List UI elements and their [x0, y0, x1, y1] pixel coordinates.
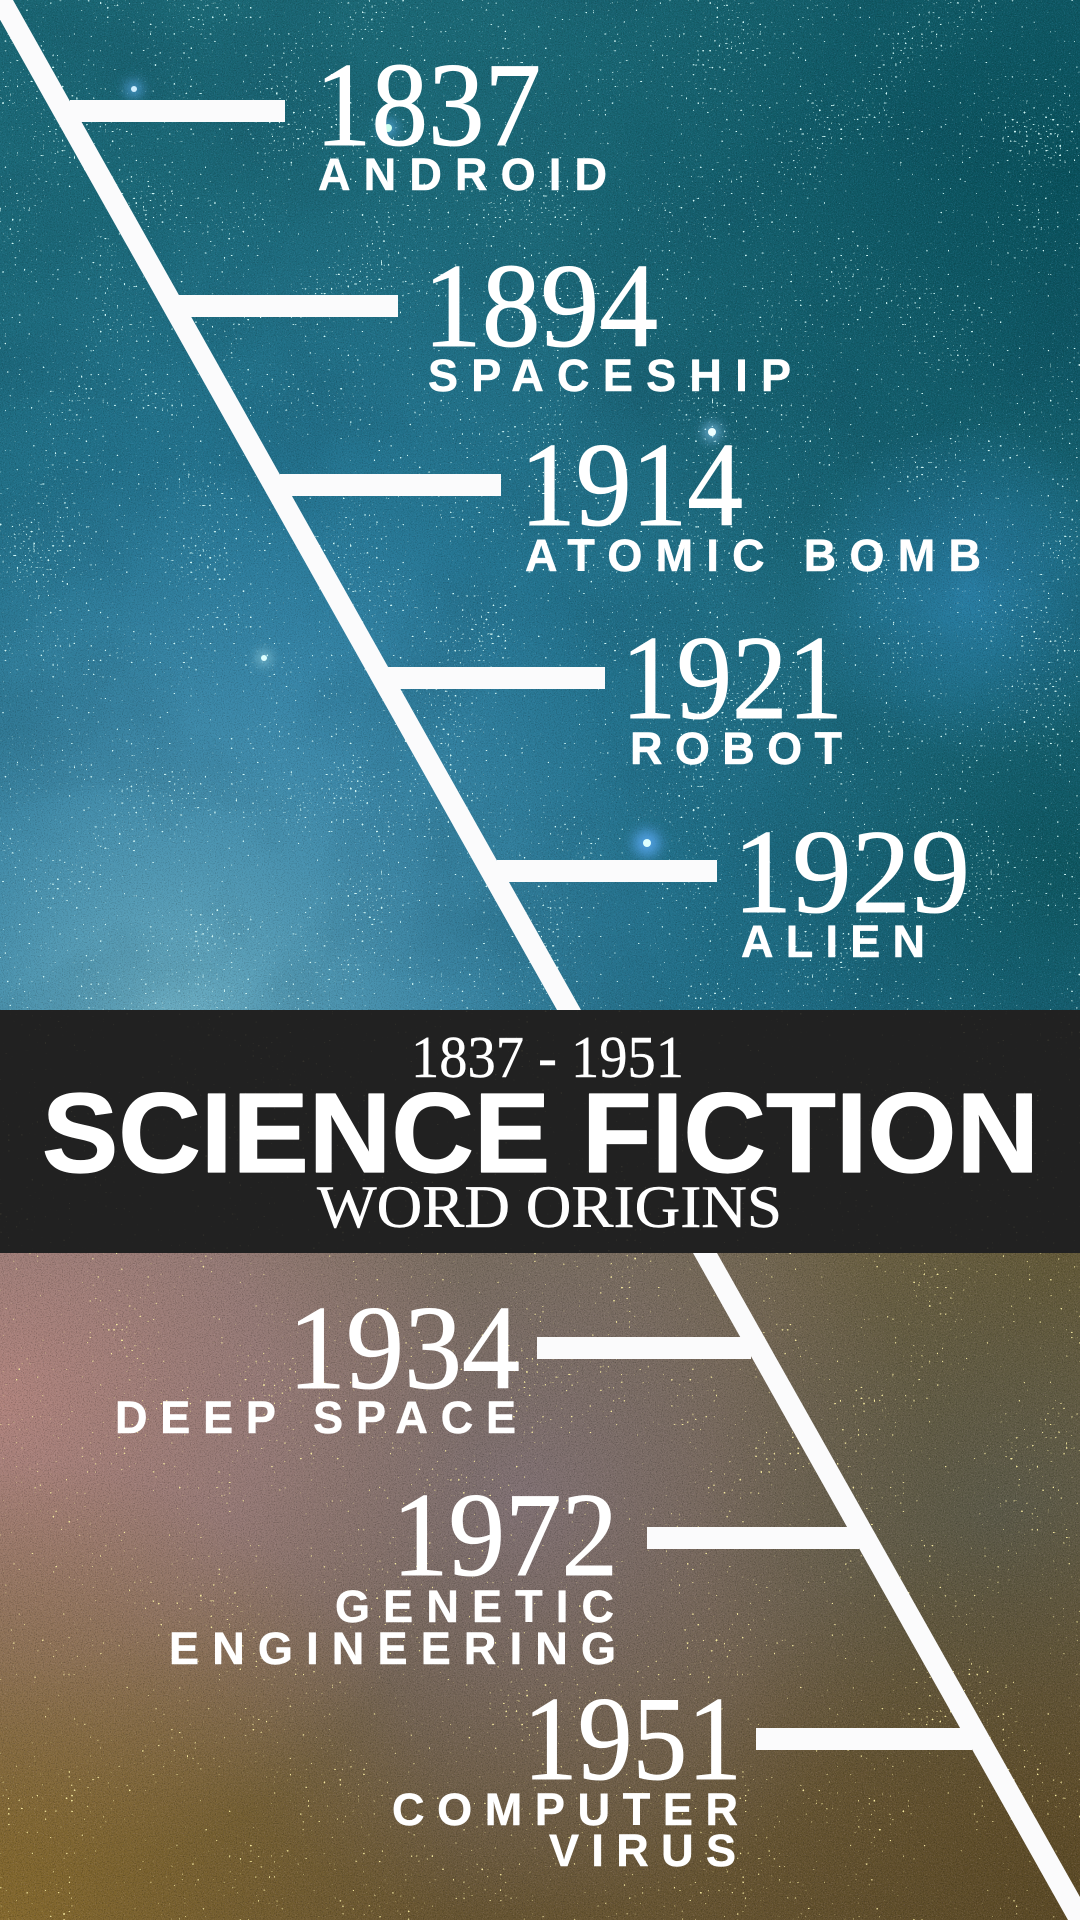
timeline entry: 1929 alien: 1929 [733, 805, 970, 938]
timeline entry: 1951 computer virus: VIRUS [549, 1825, 736, 1876]
lower diagonal timeline [693, 1253, 1080, 1920]
timeline entry: 1894 spaceship: 1894 [423, 239, 658, 372]
title: date range: 1837 - 1951 [411, 1024, 684, 1090]
timeline entry: 1914 atomic bomb: ATOMIC BOMB [525, 530, 981, 581]
timeline entry: 1972 genetic engineering: GENETIC [335, 1581, 614, 1632]
timeline entry: 1921 robot: ROBOT [630, 723, 842, 774]
upper diagonal timeline [0, 0, 581, 1010]
timeline entry: 1929 alien [497, 805, 970, 967]
timeline entry: 1921 robot [388, 611, 843, 774]
timeline entry: 1951 computer virus: COMPUTER [392, 1784, 738, 1835]
timeline entry: 1929 alien: ALIEN [741, 916, 925, 967]
timeline entry: 1914 atomic bomb: 1914 [520, 418, 743, 551]
timeline entry: 1894 spaceship [178, 239, 791, 401]
timeline entry: 1951 computer virus [392, 1672, 972, 1876]
timeline entry: 1837 android: 1837 [315, 38, 541, 171]
timeline entry: 1972 genetic engineering [169, 1468, 859, 1674]
timeline entry: 1972 genetic engineering: ENGINEERING [169, 1623, 616, 1674]
timeline entry: 1972 genetic engineering: 1972 [392, 1468, 618, 1601]
title band [0, 1010, 1080, 1253]
timeline entry: 1934 deep space: 1934 [288, 1281, 520, 1414]
panel: warm starfield background [0, 1253, 1080, 1920]
timeline entry: 1894 spaceship: SPACESHIP [428, 350, 791, 401]
timeline entry: 1837 android: ANDROID [318, 149, 607, 200]
timeline entry: 1914 atomic bomb [280, 418, 981, 581]
timeline entry: 1951 computer virus: 1951 [523, 1672, 742, 1805]
timeline entry: 1921 robot: 1921 [621, 611, 843, 744]
panel: blue starfield background [0, 0, 1080, 1010]
title: science fiction: SCIENCE FICTION [42, 1070, 1039, 1196]
timeline entry: 1934 deep space [115, 1281, 751, 1443]
timeline entry: 1837 android [70, 38, 607, 200]
timeline entry: 1934 deep space: DEEP SPACE [115, 1392, 516, 1443]
subtitle: word origins: WORD ORIGINS [317, 1174, 782, 1240]
